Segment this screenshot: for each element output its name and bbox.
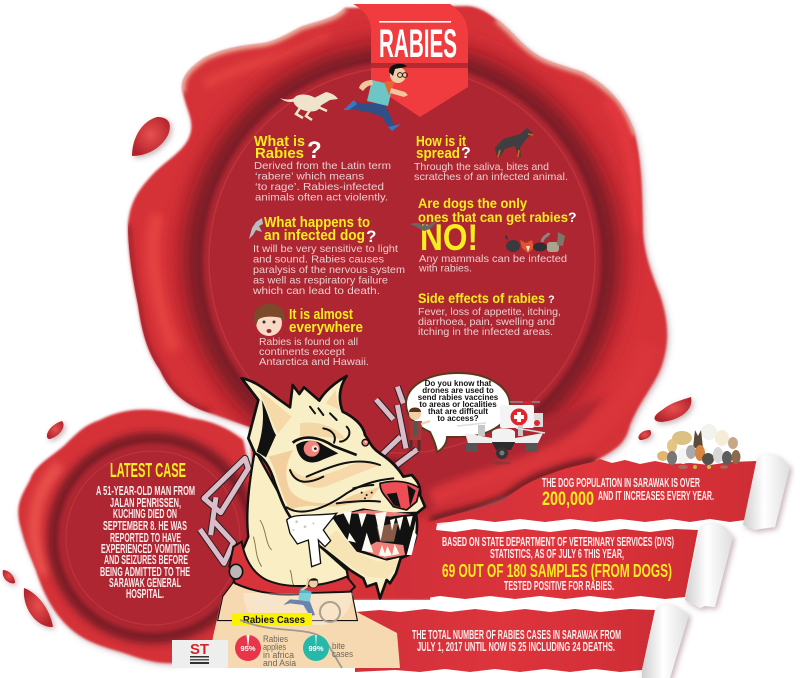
pie: 95 percent xyxy=(235,635,261,661)
are dogs the only ones: Any mammals can be infected xyxy=(419,253,567,265)
pie: 99 percent: 99% xyxy=(308,644,324,653)
neck xyxy=(218,450,357,620)
ribbon text: total cases: JULY 1, 2017 UNTIL NOW IS 25 INCLUDING 24 DEATHS. xyxy=(417,640,615,654)
chains xyxy=(200,387,417,563)
icon: greyhound xyxy=(280,92,338,120)
side effects of rabies xyxy=(418,290,561,338)
side effects of rabies: Side effects of rabies xyxy=(418,290,545,306)
ribbon text: total cases xyxy=(412,628,621,654)
are dogs the only ones: Are dogs the only xyxy=(418,195,527,211)
it is almost everywhere: It is almost xyxy=(289,307,353,323)
what is rabies: What is xyxy=(254,133,305,150)
what happens to an infected dog: an infected dog xyxy=(264,228,365,244)
ST logo: ST xyxy=(190,641,209,658)
mouth xyxy=(332,508,417,561)
latest case text: A 51-YEAR-OLD MAN FROM xyxy=(96,484,195,498)
what happens to an infected dog: paralysis of the nervous system xyxy=(253,264,405,276)
small hanging man xyxy=(283,578,318,616)
speech bubble: that are difficult xyxy=(428,407,488,416)
speech bubble: drones are used to xyxy=(422,386,494,395)
teeth xyxy=(343,512,413,557)
collar xyxy=(229,542,355,595)
dog body panel xyxy=(208,590,400,668)
ear shadow xyxy=(257,400,276,457)
yellow label xyxy=(232,613,312,625)
what is rabies: ‘rabere’ which means xyxy=(255,170,364,182)
nose xyxy=(380,481,420,510)
how is it spread xyxy=(414,134,568,183)
side effects of rabies: diarrhoea, pain, swelling and xyxy=(418,316,555,328)
pie: 99 percent xyxy=(303,635,329,661)
latest case text xyxy=(96,460,195,601)
latest case text: KUCHING DIED ON xyxy=(113,507,177,521)
what is rabies: ? xyxy=(307,137,322,164)
it is almost everywhere: Rabies is found on all xyxy=(259,336,358,348)
speech bubble: to areas or localities xyxy=(419,400,497,409)
it is almost everywhere: everywhere xyxy=(289,320,363,336)
pie label: bite cases xyxy=(332,641,353,659)
illustration: rabid dog xyxy=(200,376,425,620)
what happens to an infected dog xyxy=(249,215,405,297)
ribbon: dog population xyxy=(425,455,790,530)
ribbon curl 2 xyxy=(685,524,733,608)
ribbon text: dog population xyxy=(542,476,714,510)
ribbon text: DVS statistics: TESTED POSITIVE FOR RABIES. xyxy=(504,579,614,593)
ribbon curl 3 xyxy=(642,605,689,678)
translucent lens with rabies cases: Rabies Cases xyxy=(243,615,305,626)
icon: grey horse xyxy=(249,218,263,239)
pie label: Africa and Asia: in africa xyxy=(263,650,294,660)
it is almost everywhere xyxy=(254,304,369,368)
icon: boy xyxy=(254,304,285,336)
what is rabies xyxy=(254,133,391,204)
latest case text: SEPTEMBER 8. HE WAS xyxy=(103,519,187,533)
how is it spread: ? xyxy=(461,145,471,162)
speech bubble: Do you know that xyxy=(425,379,492,388)
speech bubble: send rabies vaccines xyxy=(418,393,499,402)
what happens to an infected dog: and sound. Rabies causes xyxy=(253,254,384,266)
wrinkles xyxy=(287,407,393,512)
pie label: bite cases: cases xyxy=(332,649,353,659)
drool xyxy=(287,513,337,567)
title: RABIES xyxy=(379,22,457,66)
ribbon curl 1 xyxy=(743,455,790,530)
pie label: Africa and Asia xyxy=(263,634,296,668)
are dogs the only ones: with rabies. xyxy=(418,262,472,274)
are dogs the only ones xyxy=(418,195,577,274)
speech bubble: to access? xyxy=(437,414,479,423)
pie label: Africa and Asia: Rabies xyxy=(263,634,288,644)
wax seal: latest case xyxy=(18,410,260,663)
wax seal: main xyxy=(128,6,667,600)
what happens to an infected dog: which can lead to death. xyxy=(252,285,380,297)
icon: drone with medkit xyxy=(457,401,545,464)
icon: bat xyxy=(410,222,437,231)
how is it spread: spread xyxy=(416,146,460,162)
muzzle whisker dots xyxy=(361,492,373,499)
tan shading xyxy=(268,450,380,510)
ribbon text: DVS statistics: 69 OUT OF 180 SAMPLES (FROM DOGS) xyxy=(442,560,672,581)
icon: doberman xyxy=(495,128,533,157)
latest case text: SARAWAK GENERAL xyxy=(109,576,181,590)
ST logo xyxy=(172,640,228,668)
head xyxy=(242,376,425,598)
collar spike xyxy=(229,564,243,579)
ribbon text: DVS statistics xyxy=(442,535,674,593)
what is rabies: Derived from the Latin term xyxy=(254,160,391,172)
eye xyxy=(293,438,357,462)
title banner xyxy=(353,4,468,117)
what is rabies: Rabies xyxy=(255,145,304,162)
it is almost everywhere: Antarctica and Hawaii. xyxy=(259,356,369,368)
pie label: Africa and Asia: and Asia xyxy=(263,658,296,668)
latest case text: HOSPITAL. xyxy=(126,587,164,601)
what happens to an infected dog: ? xyxy=(366,227,376,246)
icon: mammals xyxy=(505,232,565,253)
what happens to an infected dog: as well as respiratory failure xyxy=(253,274,388,286)
icon: presenter man xyxy=(409,408,430,451)
side effects of rabies: Fever, loss of appetite, itching, xyxy=(418,306,561,318)
what is rabies: animals often act violently. xyxy=(255,192,388,204)
are dogs the only ones: NO! xyxy=(420,217,478,258)
latest case text: AND SEIZURES BEFORE xyxy=(104,553,188,567)
far eye xyxy=(362,439,369,446)
what happens to an infected dog: It will be very sensitive to light xyxy=(253,243,398,255)
ribbon text: dog population: 200,000 xyxy=(542,488,594,510)
ribbon: DVS statistics xyxy=(395,523,733,608)
are dogs the only ones: ones that can get rabies xyxy=(418,209,568,225)
pie label: bite cases: bite xyxy=(332,641,345,651)
ribbon text: total cases: THE TOTAL NUMBER OF RABIES CASES IN SARAWAK FROM xyxy=(412,628,621,642)
icon: running man xyxy=(343,64,408,131)
what happens to an infected dog: What happens to xyxy=(264,215,370,231)
how is it spread: Through the saliva, bites and xyxy=(414,161,549,173)
pie: 95 percent: 95% xyxy=(240,644,256,653)
latest case text: REPORTED TO HAVE xyxy=(110,531,181,545)
how is it spread: How is it xyxy=(416,134,466,150)
pie label: Africa and Asia: applies xyxy=(263,642,286,652)
latest case text: LATEST CASE xyxy=(110,460,186,482)
latest case text: EXPERIENCED VOMITING xyxy=(101,542,190,556)
icon: dog pack xyxy=(657,424,740,469)
how is it spread: scratches of an infected animal. xyxy=(414,171,568,183)
speech bubble xyxy=(406,373,510,452)
wax drops xyxy=(3,117,691,627)
latest case text: BEING ADMITTED TO THE xyxy=(100,565,190,579)
side effects of rabies: ? xyxy=(548,294,555,306)
ribbon text: dog population: AND IT INCREASES EVERY YEAR. xyxy=(598,489,714,503)
it is almost everywhere: continents except xyxy=(259,346,345,358)
translucent lens with rabies cases xyxy=(232,593,353,626)
body contour xyxy=(240,620,342,668)
white tear backing xyxy=(352,520,800,678)
what is rabies: ‘to rage’. Rabies-infected xyxy=(255,181,384,193)
are dogs the only ones: ? xyxy=(568,209,577,225)
ribbon: total cases xyxy=(355,605,689,678)
latest case text: JALAN PENRISSEN, xyxy=(110,496,181,510)
ribbon text: DVS statistics: STATISTICS, AS OF JULY 6 THIS YEAR, xyxy=(490,547,624,561)
side effects of rabies: itching in the infected areas. xyxy=(418,326,553,338)
